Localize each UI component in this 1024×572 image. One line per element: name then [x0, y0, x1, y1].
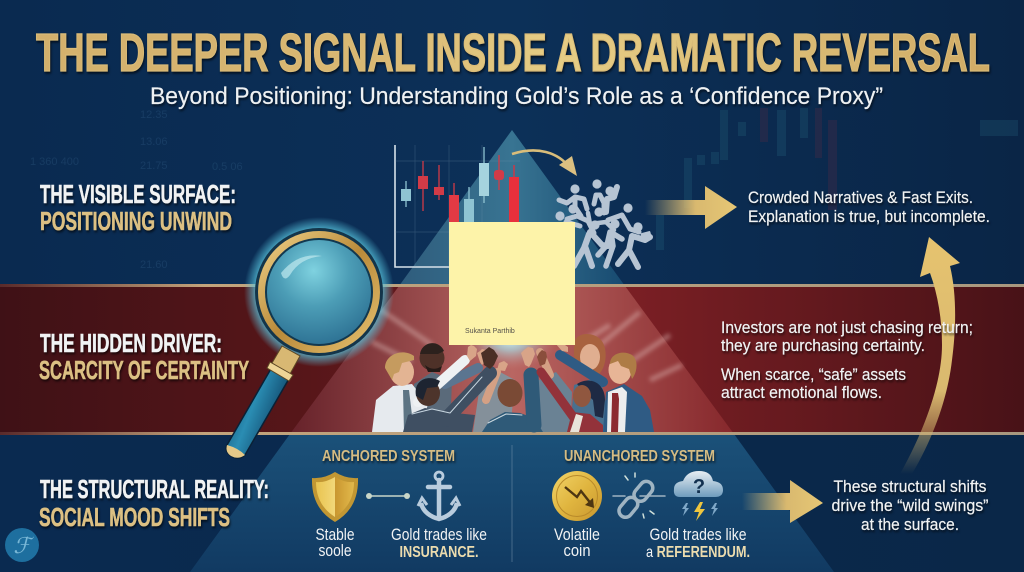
band divider: upper: [0, 284, 1024, 287]
background: red middle band: [0, 286, 1024, 434]
pyramid: top section: [399, 130, 625, 286]
candlestick chart: [395, 145, 520, 267]
text: hidden driver explanation: attract emotional flows.: [721, 383, 882, 402]
man in blue suit: [603, 353, 654, 432]
illustration: crowd reaching upward: [372, 310, 654, 432]
text: stable scale: [316, 525, 354, 560]
band divider: lower: [0, 432, 1024, 435]
heading: structural reality: THE STRUCTURAL REALITY:: [40, 474, 269, 504]
text: structural explanation: [832, 477, 989, 534]
text: gold trades like a referendum: a REFERENDUM.: [646, 544, 750, 561]
pyramid: bottom section: [190, 434, 834, 572]
gold band: [258, 231, 380, 353]
heading: visible surface: THE VISIBLE SURFACE:: [40, 179, 236, 209]
text: gold trades like insurance: INSURANCE.: [400, 544, 478, 561]
arrow: curved upward loop: [900, 237, 960, 474]
front man, back of head: [482, 347, 543, 432]
heading: hidden driver: SCARCITY OF CERTAINTY: [39, 355, 249, 385]
icon: magnifying glass: [226, 217, 394, 458]
text: stable scale: soole: [318, 541, 352, 560]
text: hidden driver explanation: Investors are not just chasing return;: [721, 318, 973, 337]
text: surface explanation: Crowded Narratives & Fast Exits.: [748, 188, 973, 207]
background: faint market candles and numbers: [30, 108, 1018, 271]
lens highlight: [281, 255, 322, 279]
background: faint market candles and numbers: 12.35: [140, 109, 168, 121]
heading: structural reality: SOCIAL MOOD SHIFTS: [39, 502, 230, 532]
handle end cap: [226, 445, 245, 458]
divider between systems: [511, 445, 513, 562]
icon: gold shield: [312, 472, 358, 522]
text: volatile coin: coin: [564, 541, 590, 560]
back figures: [473, 352, 572, 432]
ring: [255, 228, 383, 356]
heading: visible surface: POSITIONING UNWIND: [40, 206, 232, 236]
text: structural explanation: These structural shifts: [834, 477, 986, 496]
heading: unanchored system: UNANCHORED SYSTEM: [564, 448, 715, 465]
bearded man: [414, 343, 488, 432]
background: top band: [0, 0, 1024, 286]
background: faint market candles and numbers: 21.75: [140, 160, 168, 172]
text: hidden driver explanation: [721, 318, 973, 402]
text: volatile coin: [554, 525, 600, 560]
heading: structural reality: [39, 474, 269, 532]
heading: hidden driver: [39, 328, 249, 385]
icon: crowd of running people: [555, 179, 651, 267]
background: faint market candles and numbers: 0.5 06: [212, 161, 243, 173]
text: gold trades like a referendum: [646, 525, 750, 561]
front man in dark suit: [403, 347, 508, 432]
outer glow: [244, 217, 394, 367]
background: faint market candles and numbers: 21.60: [140, 259, 168, 271]
icon: anchor: [418, 472, 460, 519]
woman in red jacket: [537, 350, 605, 432]
handle: [226, 367, 290, 458]
icon: broken chain: [613, 473, 665, 520]
icon: falling gold coin: [552, 471, 602, 521]
heading: visible surface: [40, 179, 236, 236]
background: navy bottom band: [0, 434, 1024, 572]
glow behind hands: [462, 310, 558, 370]
sticky note: Sukanta Parthib: [465, 328, 515, 335]
sticky note: [449, 222, 575, 345]
logo badge: [5, 528, 39, 562]
light rays behind crowd: [372, 308, 682, 380]
heading: anchored system: ANCHORED SYSTEM: [322, 448, 455, 465]
text: gold trades like a referendum: Gold trades like: [650, 525, 746, 544]
man in white shirt: [372, 345, 477, 432]
arrow: structure to explanation: [742, 480, 823, 523]
woman with auburn hair: [555, 334, 612, 432]
arrow: surface to explanation: [645, 186, 737, 229]
pyramid: middle section: [290, 286, 734, 434]
text: structural explanation: at the surface.: [861, 515, 959, 534]
logo badge: ℱ: [13, 533, 34, 558]
text: stable scale: Stable: [316, 525, 354, 544]
text: gold trades like insurance: [391, 525, 487, 561]
text: hidden driver explanation: When scarce, “safe” assets: [721, 365, 906, 384]
text: surface explanation: Explanation is true, but incomplete.: [748, 207, 990, 226]
text: hidden driver explanation: they are purchasing certainty.: [721, 336, 925, 355]
background: faint market candles and numbers: 1 360 400: [30, 156, 79, 168]
text: surface explanation: [748, 188, 990, 226]
text: gold trades like insurance: Gold trades like: [391, 525, 487, 544]
text: volatile coin: Volatile: [554, 525, 600, 544]
heading: hidden driver: THE HIDDEN DRIVER:: [40, 328, 222, 358]
curved arrow into crowd: [512, 150, 577, 176]
icon: storm cloud with question mark: ?: [693, 476, 705, 498]
connector: stable link: [366, 493, 410, 499]
subtitle: Beyond Positioning: Understanding Gold’s Role as a ‘Confidence Proxy”: [150, 83, 883, 110]
background: faint market candles and numbers: 13.06: [140, 136, 168, 148]
lens: [266, 239, 372, 345]
text: structural explanation: drive the “wild swings”: [832, 496, 989, 515]
handle collar: [267, 362, 293, 381]
icon: storm cloud with question mark: [674, 471, 723, 521]
handle neck: [272, 346, 300, 374]
